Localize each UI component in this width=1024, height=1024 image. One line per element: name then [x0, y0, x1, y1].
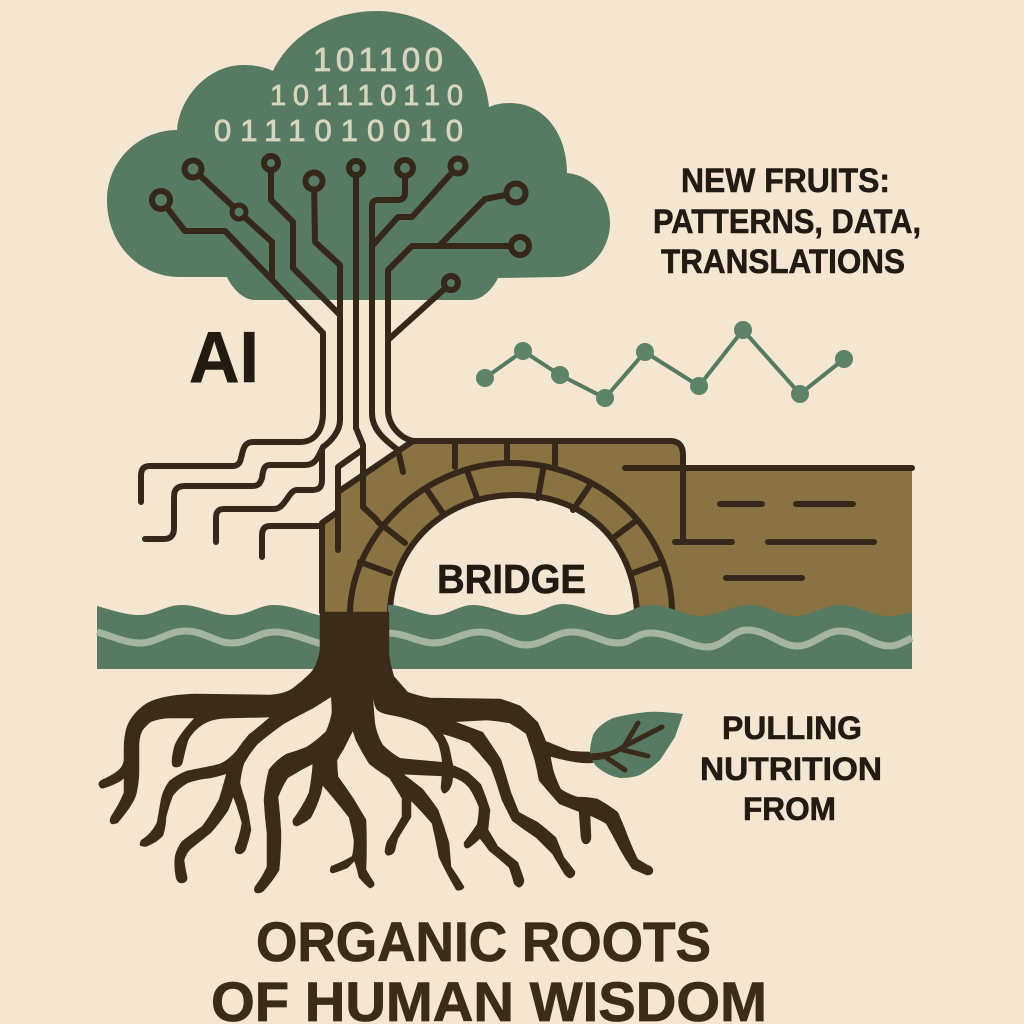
title: ORGANIC ROOTS [256, 910, 711, 973]
binary code text: 101100 [313, 41, 443, 78]
label: new fruits: NEW FRUITS: [681, 162, 890, 200]
title [211, 910, 767, 1024]
label: pulling nutrition from [700, 710, 882, 827]
bridge masonry [322, 441, 912, 625]
circuit branches [141, 163, 520, 557]
label: pulling nutrition from: PULLING [722, 710, 862, 746]
label: pulling nutrition from: FROM [743, 791, 836, 827]
label: pulling nutrition from: NUTRITION [700, 751, 882, 787]
binary code text: 0111010010 [214, 113, 463, 148]
label: new fruits [653, 162, 921, 281]
tree canopy cloud [107, 11, 610, 300]
river water [97, 604, 912, 669]
label: AI: AI [189, 318, 259, 398]
binary code text: 101110110 [270, 80, 463, 112]
label: bridge: BRIDGE [437, 556, 586, 602]
line chart [476, 321, 853, 407]
label: new fruits: PATTERNS, DATA, [653, 203, 921, 241]
icon: leaf on root [585, 712, 683, 778]
circuit nodes [152, 156, 529, 290]
binary code text [214, 41, 463, 148]
tree roots [100, 612, 652, 892]
label: new fruits: TRANSLATIONS [661, 243, 905, 281]
